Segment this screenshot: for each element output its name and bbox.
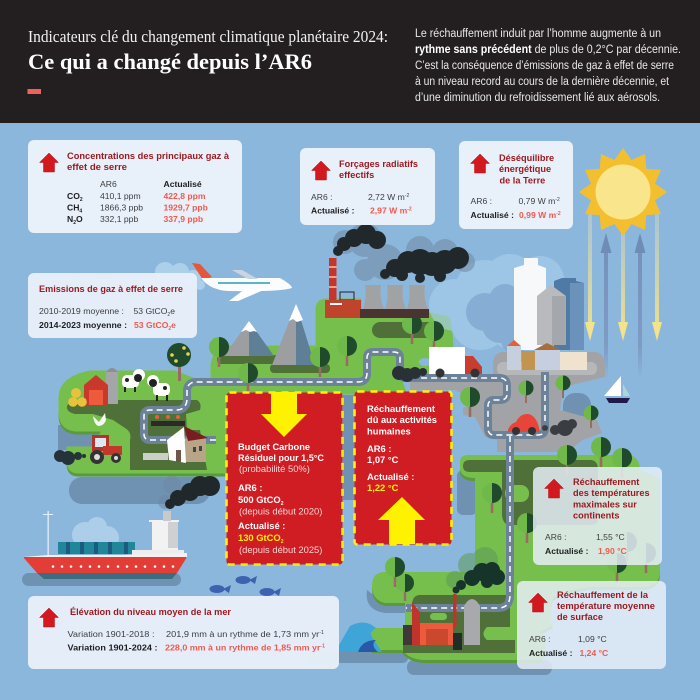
déséquilibre heading: Déséquilibre: [499, 153, 554, 163]
wave: [335, 622, 382, 652]
factory black smoke: [333, 224, 469, 283]
déséquilibre heading: [499, 153, 554, 186]
forçages values: Actualisé :: [311, 206, 355, 216]
forçages values: [311, 192, 412, 216]
budget text: (depuis début 2025): [239, 544, 322, 555]
maximales heading: des températures: [573, 488, 650, 498]
airplane: [155, 262, 292, 301]
maximales heading: Réchauffement: [573, 477, 639, 487]
ship smoke: [158, 476, 220, 509]
warming text: Actualisé :: [367, 471, 414, 482]
intro text: [415, 28, 681, 104]
mer values: 228,0 mm à un rythme de 1,85 mm yr: [165, 642, 315, 652]
pear tree: [167, 343, 191, 381]
truck smoke: [392, 366, 427, 382]
maximales values: AR6 :: [545, 532, 566, 542]
arrow: budget down: [261, 392, 307, 437]
city haze cloud: [429, 254, 564, 350]
maximales heading: [573, 477, 650, 520]
land: lower right: [372, 455, 660, 663]
panel: niveau de la mer: [28, 596, 339, 669]
warming text: 1,22 °C: [367, 482, 399, 493]
forçages values: AR6 :: [311, 192, 332, 202]
déséquilibre values: 0,99 W m: [519, 210, 556, 220]
panel: déséquilibre énergétique: [459, 141, 573, 229]
concentrations table: 2: [80, 197, 83, 203]
concentrations table: 1929,7 ppb: [164, 202, 208, 212]
concentrations table: 410,1 ppm: [100, 191, 141, 201]
déséquilibre heading: énergétique: [499, 164, 551, 174]
émissions values: 2014-2023 moyenne :: [39, 320, 127, 330]
concentrations table: 1866,3 ppb: [100, 202, 143, 212]
panel: budget carbone: [226, 392, 342, 564]
green lobes inside dark ground: [430, 485, 529, 620]
mer heading: Élévation du niveau moyen de la mer: [70, 606, 231, 617]
warming text: [367, 403, 437, 493]
smoke halo: [333, 223, 475, 281]
concentrations heading: Concentrations des principaux gaz à: [67, 151, 230, 161]
forçages values: -2: [405, 193, 409, 199]
icon: up arrow: [40, 153, 58, 172]
farmhouse: [167, 426, 208, 463]
surface values: Actualisé :: [529, 648, 573, 658]
intro text: C’est la conséquence d’émissions de gaz à effet de serre: [415, 60, 674, 72]
forçages heading: Forçages radiatifs: [339, 159, 418, 169]
intro text: Le réchauffement induit par l’homme augmente à un: [415, 28, 661, 40]
concentrations heading: [67, 151, 230, 172]
surface values: AR6 :: [529, 634, 550, 644]
car smoke: [542, 419, 577, 436]
panel: températures maximales: [533, 467, 662, 565]
chicken: [93, 413, 106, 426]
budget text: Actualisé :: [238, 520, 285, 531]
maximales values: 1,55 °C: [596, 532, 625, 542]
panel: concentrations: [28, 140, 242, 233]
header band: [0, 0, 700, 123]
déséquilibre values: 0,79 W m: [518, 196, 555, 206]
icon: up arrow: [528, 593, 548, 612]
maximales heading: continents: [573, 510, 619, 520]
concentrations table: N: [67, 214, 73, 224]
émissions values: 2: [167, 312, 170, 318]
mer values: Variation 1901-2024 :: [68, 642, 158, 652]
panel: forçages radiatifs: [300, 148, 435, 225]
déséquilibre values: -2: [556, 211, 561, 217]
land: city grey ground: [410, 352, 605, 452]
budget text: 2: [281, 539, 284, 545]
warming text: Réchauffement: [367, 403, 435, 414]
arrow: warming up: [378, 497, 425, 544]
panel: émissions: [28, 273, 197, 338]
budget text: 500 GtCO: [238, 494, 281, 505]
forçages values: -2: [407, 206, 412, 212]
surface values: 1,24 °C: [580, 648, 608, 658]
panel: réchauffement dû aux activités humaines: [354, 392, 452, 544]
mer values: -1: [319, 630, 324, 636]
warming text: dû aux activités: [367, 414, 437, 425]
maximales heading: maximales sur: [573, 500, 637, 510]
émissions values: [39, 306, 176, 332]
intro text: d’une diminution du refroidissement lié aux aérosols.: [415, 92, 660, 104]
déséquilibre values: [470, 196, 561, 220]
budget text: 2: [281, 501, 284, 507]
concentrations table: AR6: [100, 179, 117, 189]
émissions values: 53 GtCO: [134, 320, 168, 330]
surface values: 1,09 °C: [578, 634, 607, 644]
cows: [122, 369, 170, 401]
farm: barn, silo and hay: [68, 368, 118, 407]
concentrations table: 337,9 ppb: [164, 214, 203, 224]
lower factory: [403, 594, 480, 650]
budget text: (probabilité 50%): [239, 463, 310, 474]
land shadows and lakes: [22, 393, 591, 675]
forçages heading: effectifs: [339, 170, 374, 180]
surface heading: de surface: [557, 612, 603, 622]
icon: up arrow: [544, 479, 564, 498]
concentrations table: CH: [67, 202, 79, 212]
mer values: [68, 629, 325, 652]
émissions values: 2: [168, 326, 171, 332]
sailing boat: [604, 376, 630, 403]
warming text: humaines: [367, 426, 411, 436]
land: farm island: [60, 372, 226, 475]
title line: Indicateurs clé du changement climatique planétaire 2024:: [28, 27, 388, 46]
icon: up arrow: [312, 161, 330, 180]
lighter city street: [497, 362, 597, 375]
émissions values: 2010-2019 moyenne :: [39, 306, 124, 316]
surface heading: température moyenne: [557, 601, 655, 611]
tractor: [90, 435, 122, 464]
surface heading: Réchauffement de la: [557, 590, 649, 600]
city dark haze: [466, 284, 529, 354]
budget text: 130 GtCO: [238, 532, 281, 543]
car: [508, 414, 540, 435]
warming text: AR6 :: [367, 443, 391, 454]
forçages heading: [339, 159, 418, 180]
accent dash: [28, 89, 41, 94]
surface heading: [557, 590, 655, 622]
émissions values: e: [171, 320, 176, 330]
mer values: -1: [320, 644, 325, 650]
icon: up arrow: [470, 154, 490, 173]
maximales values: Actualisé :: [545, 546, 589, 556]
budget text: Résiduel pour 1,5°C: [238, 452, 324, 463]
concentrations table: 332,1 ppb: [100, 214, 138, 224]
intro text: à un niveau record au cours de la dernière décennie, et: [415, 76, 670, 88]
concentrations heading: effet de serre: [67, 162, 127, 172]
émissions heading: Emissions de gaz à effet de serre: [39, 284, 183, 294]
forçages values: 2,72 W m: [368, 192, 405, 202]
truck: [429, 347, 482, 378]
lower factory smoke: [446, 547, 505, 594]
intro text: rythme sans précédent de plus de 0,2°C par décennie.: [415, 44, 681, 56]
panel: température moyenne de surface: [517, 581, 666, 669]
tractor smoke: [54, 450, 86, 465]
déséquilibre values: -2: [555, 197, 560, 203]
arrows: solar radiation: [585, 212, 662, 380]
dark ground patches: [67, 322, 598, 653]
budget text: (depuis début 2020): [239, 506, 322, 516]
concentrations table: 4: [79, 208, 82, 214]
mountains: [224, 304, 315, 365]
main heading: Ce qui a changé depuis l’AR6: [28, 49, 312, 74]
fish: [210, 576, 281, 596]
mer values: Variation 1901-2018 :: [68, 629, 154, 639]
vegetable bed: [151, 415, 185, 426]
cargo ship: [23, 511, 187, 579]
budget text: Budget Carbone: [238, 441, 310, 452]
déséquilibre values: AR6 :: [470, 196, 492, 206]
concentrations table: 422,8 ppm: [164, 191, 206, 201]
small lake near truck: [419, 358, 431, 366]
concentrations table: Actualisé: [164, 179, 202, 189]
concentrations table: [67, 179, 208, 226]
concentrations table: CO: [67, 191, 80, 201]
maximales values: 1,90 °C: [598, 546, 627, 556]
city towers: [514, 258, 584, 350]
sun with rays: [579, 148, 667, 236]
trees: [209, 314, 656, 601]
émissions values: e: [170, 306, 175, 316]
déséquilibre values: Actualisé :: [470, 210, 514, 220]
déséquilibre heading: de la Terre: [500, 176, 545, 186]
cooling towers: [360, 285, 429, 318]
concentrations table: O: [76, 214, 83, 224]
mer values: 201,9 mm à un rythme de 1,73 mm yr: [166, 629, 309, 639]
surface values: [529, 634, 608, 658]
concentrations table: 2: [73, 220, 76, 226]
fence: [143, 453, 168, 460]
factory with chimney: [325, 258, 361, 318]
historic buildings: [507, 340, 587, 370]
forçages values: 2,97 W m: [370, 206, 407, 216]
warming text: 1,07 °C: [367, 454, 399, 465]
budget text: [238, 441, 324, 555]
budget text: AR6 :: [238, 482, 262, 493]
icon: up arrow: [40, 608, 58, 627]
road network: [144, 352, 545, 608]
maximales values: [545, 532, 627, 556]
émissions values: 53 GtCO: [134, 306, 167, 316]
land: central land with factory: [212, 300, 452, 393]
